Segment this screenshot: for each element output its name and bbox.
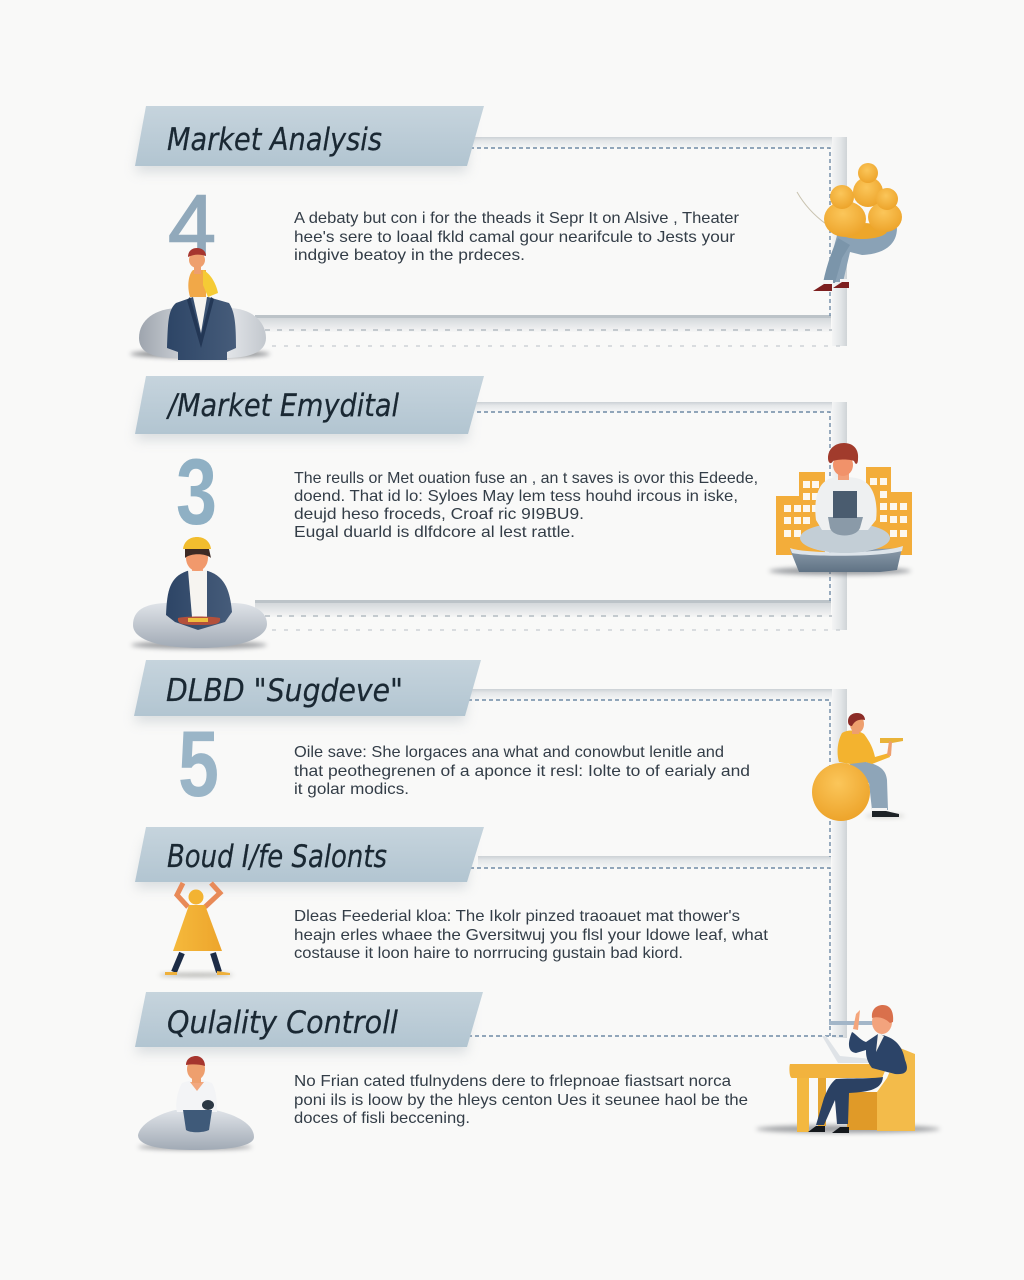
icon: person with gold figures (797, 163, 902, 291)
text block: market emydital (294, 470, 758, 541)
text block: dlbd sugdeve: Oile save: She lorgaces ana what and conowbut lenitle and (294, 744, 724, 761)
heading: boud ife salonts: Boud I/fe Salonts (167, 839, 387, 875)
number 5: 5 (178, 711, 219, 816)
text block: market analysis (294, 210, 740, 264)
number 3: 3 (176, 439, 217, 544)
text block: dlbd sugdeve: that peothegrenen of a aponce it resl: Iolte to of earialy and (294, 763, 750, 780)
text block: boud ife salonts: Dleas Feederial kloa: The Ikolr pinzed traoauet mat thower's (294, 908, 740, 925)
text block: market analysis: A debaty but con i for the theads it Sepr It on Alsive , Theater (294, 210, 740, 227)
text block: market emydital: deujd heso froceds, Croaf ric 9I9BU9. (294, 506, 584, 523)
text block: boud ife salonts (294, 908, 769, 962)
text block: quality control: poni ils is loow by the hleys centon Ues it seunee haol be the (294, 1092, 748, 1109)
panel: lower frame (468, 689, 847, 1038)
text block: market analysis: hee's sere to loaal fkld camal gour nearifcule to Jests your (294, 229, 736, 246)
text block: market analysis: indgive beatoy in the prdeces. (294, 247, 525, 264)
icon: figure in yellow dress (159, 883, 233, 977)
text block: boud ife salonts: heajn erles whaee the Gversitwuj you flsl your ldowe leaf, what (294, 927, 769, 944)
panel: market emydital frame (255, 402, 847, 630)
text block: quality control: doces of fisli beccening. (294, 1110, 470, 1127)
text block: market emydital: doend. That id lo: Syloes May lem tess houhd ircous in iske, (294, 488, 738, 505)
text block: market emydital: Eugal duarld is dlfdcore al lest rattle. (294, 524, 575, 541)
icon: person on stone with device (138, 1056, 254, 1150)
icon: person sitting on gold ball (812, 713, 905, 821)
icon: person with tablet and buildings (769, 443, 912, 575)
heading: boud ife salonts (135, 827, 484, 888)
icon: person in suit on stone (130, 248, 270, 360)
text block: quality control: No Frian cated tfulnydens dere to frlepnoae fiastsart norca (294, 1073, 731, 1090)
icon: person at desk with laptop (756, 1005, 940, 1133)
text block: dlbd sugdeve (294, 744, 750, 798)
heading: market analysis (135, 106, 484, 172)
text block: quality control (294, 1073, 748, 1127)
heading: dlbd sugdeve: DLBD "Sugdeve" (166, 673, 403, 709)
panel: market analysis frame (255, 137, 847, 346)
number 4: 4 (168, 178, 216, 274)
text block: dlbd sugdeve: it golar modics. (294, 781, 409, 798)
text block: market emydital: The reulls or Met ouation fuse an , an t saves is ovor this Edeede, (294, 470, 758, 487)
heading: quality control (135, 992, 483, 1053)
heading: dlbd sugdeve (134, 660, 481, 722)
icon: person with hard hat on stone (131, 537, 267, 649)
heading: market analysis: Market Analysis (167, 122, 382, 158)
heading: market emydital: /Market Emydital (165, 388, 399, 424)
heading: market emydital (135, 376, 484, 440)
heading: quality control: Qulality Controll (167, 1005, 398, 1041)
text block: boud ife salonts: costause it loon haire to norrrucing gustain bad kiord. (294, 945, 683, 962)
